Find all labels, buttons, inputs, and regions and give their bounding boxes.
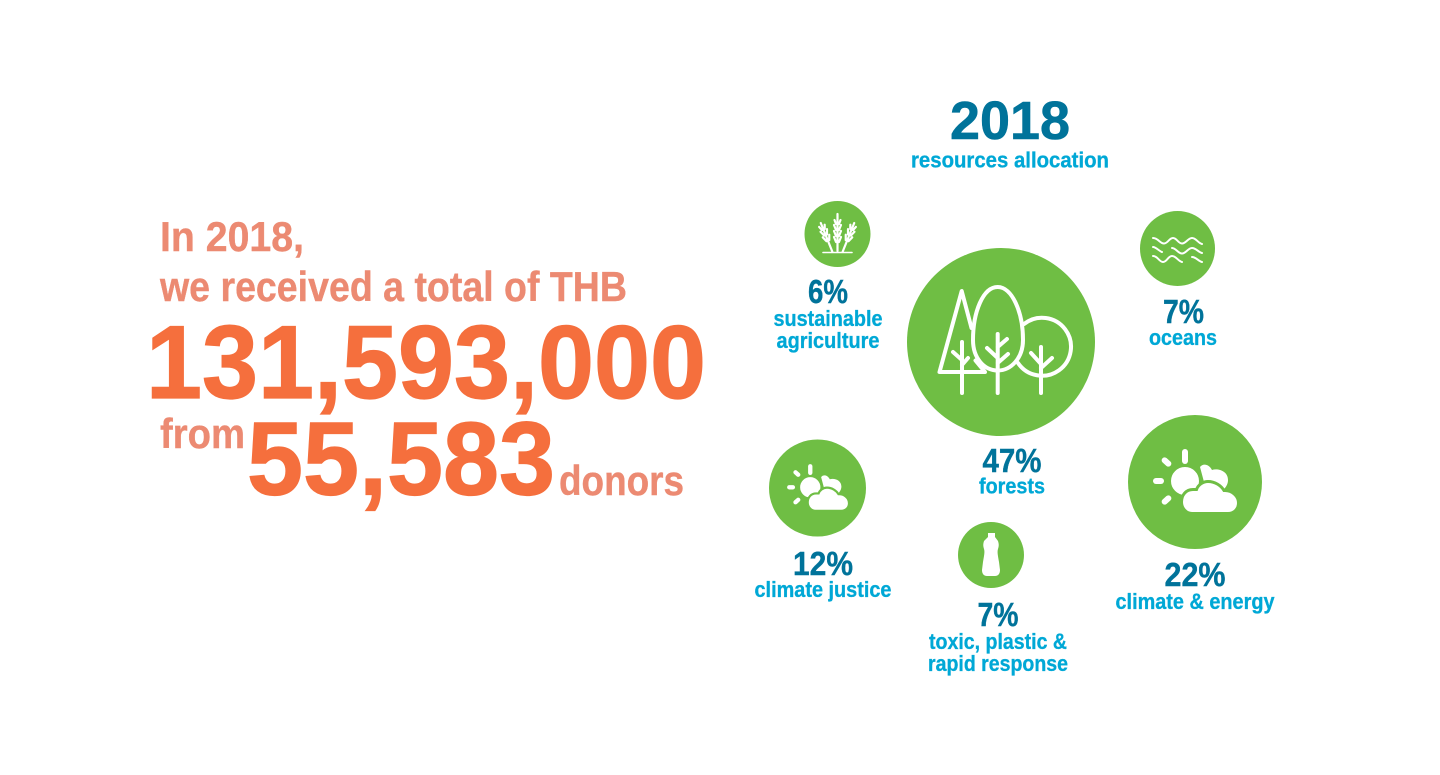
oceans label: oceans bbox=[1149, 325, 1217, 350]
item: toxic, plastic and rapid response: rapid response bbox=[928, 651, 1068, 676]
item: climate justice bbox=[754, 440, 892, 602]
donor count: 55,583 bbox=[247, 402, 555, 518]
item: toxic, plastic and rapid response bbox=[928, 522, 1068, 676]
agriculture circle bbox=[804, 201, 870, 267]
icon: bottle bbox=[982, 533, 1000, 576]
climate justice circle bbox=[769, 440, 866, 536]
toxic circle bbox=[958, 522, 1024, 588]
climate and energy label: climate & energy bbox=[1116, 589, 1275, 614]
word: donors: donors bbox=[559, 457, 684, 504]
toxic label: toxic, plastic & bbox=[929, 629, 1067, 654]
agriculture label: sustainable bbox=[774, 306, 882, 331]
allocation heading bbox=[911, 91, 1109, 172]
item: forests bbox=[907, 248, 1095, 498]
item: climate and energy bbox=[1116, 415, 1275, 614]
oceans circle bbox=[1140, 211, 1215, 286]
climate justice percentage: 12% bbox=[793, 545, 853, 582]
climate and energy percentage: 22% bbox=[1164, 556, 1226, 593]
icon: sun and clouds bbox=[1153, 449, 1238, 514]
icon: wheat bbox=[818, 214, 857, 253]
item: oceans bbox=[1140, 211, 1217, 350]
heading year: 2018 bbox=[950, 91, 1070, 151]
forests circle bbox=[907, 248, 1095, 436]
intro line: In 2018: In 2018, bbox=[160, 213, 304, 260]
climate justice label: climate justice bbox=[754, 577, 892, 602]
heading subtitle: resources allocation bbox=[911, 148, 1109, 172]
icon: sun and clouds bbox=[787, 464, 849, 511]
forests percentage: 47% bbox=[982, 442, 1042, 479]
intro line: total of THB: we received a total of THB bbox=[159, 263, 627, 310]
donation summary text bbox=[146, 213, 706, 518]
icon: trees bbox=[940, 287, 1071, 393]
word: from: from bbox=[160, 410, 245, 457]
icon: waves bbox=[1153, 238, 1202, 262]
climate and energy circle bbox=[1128, 415, 1262, 549]
agriculture percentage: 6% bbox=[808, 273, 848, 310]
toxic percentage: 7% bbox=[978, 596, 1018, 633]
forests label: forests bbox=[979, 474, 1045, 498]
oceans percentage: 7% bbox=[1163, 293, 1204, 330]
item: sustainable agriculture bbox=[774, 201, 882, 353]
total amount: 131,593,000 bbox=[146, 305, 706, 421]
item: sustainable agriculture: agriculture bbox=[776, 328, 880, 353]
